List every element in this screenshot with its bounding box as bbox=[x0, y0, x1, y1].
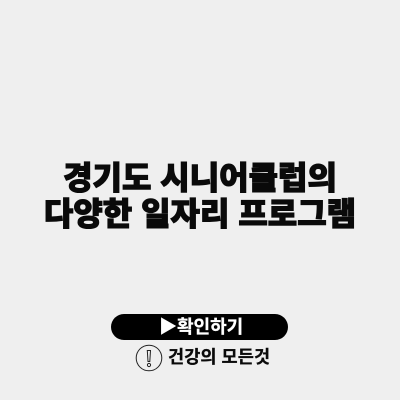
title: 다양한 일자리 프로그램 bbox=[44, 196, 356, 232]
caption: 건강의 모든것: 건강의 모든것 bbox=[168, 347, 270, 367]
button label: ▶확인하기 bbox=[159, 317, 243, 337]
title: 경기도 시니어클럽의 bbox=[63, 160, 337, 196]
button: 확인하기 bbox=[111, 314, 288, 340]
icon: exclamation in circle bbox=[136, 344, 162, 372]
title bbox=[44, 160, 356, 232]
